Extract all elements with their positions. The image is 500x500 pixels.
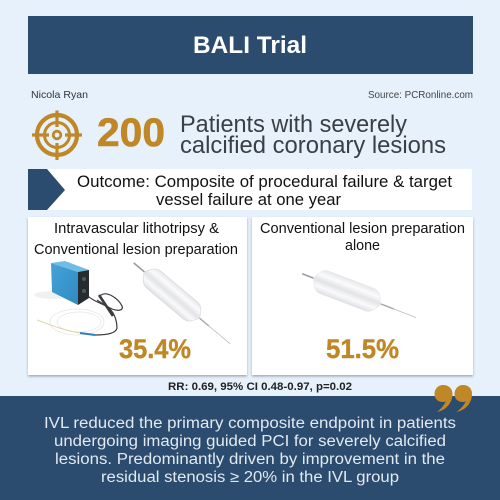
icon: balloon catheter (298, 263, 420, 329)
conclusion text (44, 415, 456, 486)
result: IVL arm: 35.4% (119, 334, 191, 364)
patient count: 200 (97, 111, 165, 155)
panel heading: Conventional lesion preparation (260, 221, 465, 237)
conclusion text: lesions. Predominantly driven by improvement in the (55, 451, 445, 468)
header banner (28, 16, 473, 74)
panel heading: Conventional lesion preparation (34, 242, 238, 258)
patient description: calcified coronary lesions (180, 132, 446, 159)
arrow (28, 169, 65, 210)
icon: target (32, 110, 82, 160)
source: Source: PCRonline.com (368, 89, 473, 101)
outcome text: vessel failure at one year (156, 190, 341, 209)
result: conventional arm: 51.5% (326, 334, 399, 364)
outcome text: Outcome: Composite of procedural failure & target (77, 172, 452, 191)
patient description: Patients with severely (180, 111, 407, 138)
panel heading (34, 221, 238, 258)
author: Nicola Ryan (31, 89, 88, 101)
panel: IVL arm (28, 217, 247, 375)
conclusion text: residual stenosis ≥ 20% in the IVL group (101, 469, 399, 486)
title: BALI Trial (193, 32, 307, 59)
panel heading: alone (345, 238, 380, 254)
panel heading (260, 221, 465, 254)
panel: conventional arm (252, 217, 473, 375)
panel heading: Intravascular lithotripsy & (54, 221, 219, 237)
icon: lithotripsy generator (34, 261, 122, 335)
icon: balloon catheter (127, 254, 237, 352)
outcome banner (28, 169, 472, 210)
conclusion text: undergoing imaging guided PCI for severely calcified (54, 433, 446, 450)
outcome text (77, 172, 452, 209)
conclusion panel (0, 396, 500, 500)
conclusion text: IVL reduced the primary composite endpoint in patients (44, 415, 456, 432)
patient description (180, 111, 446, 159)
icon: quotation mark (434, 385, 472, 412)
statistics: RR: 0.69, 95% CI 0.48-0.97, p=0.02 (168, 381, 352, 393)
